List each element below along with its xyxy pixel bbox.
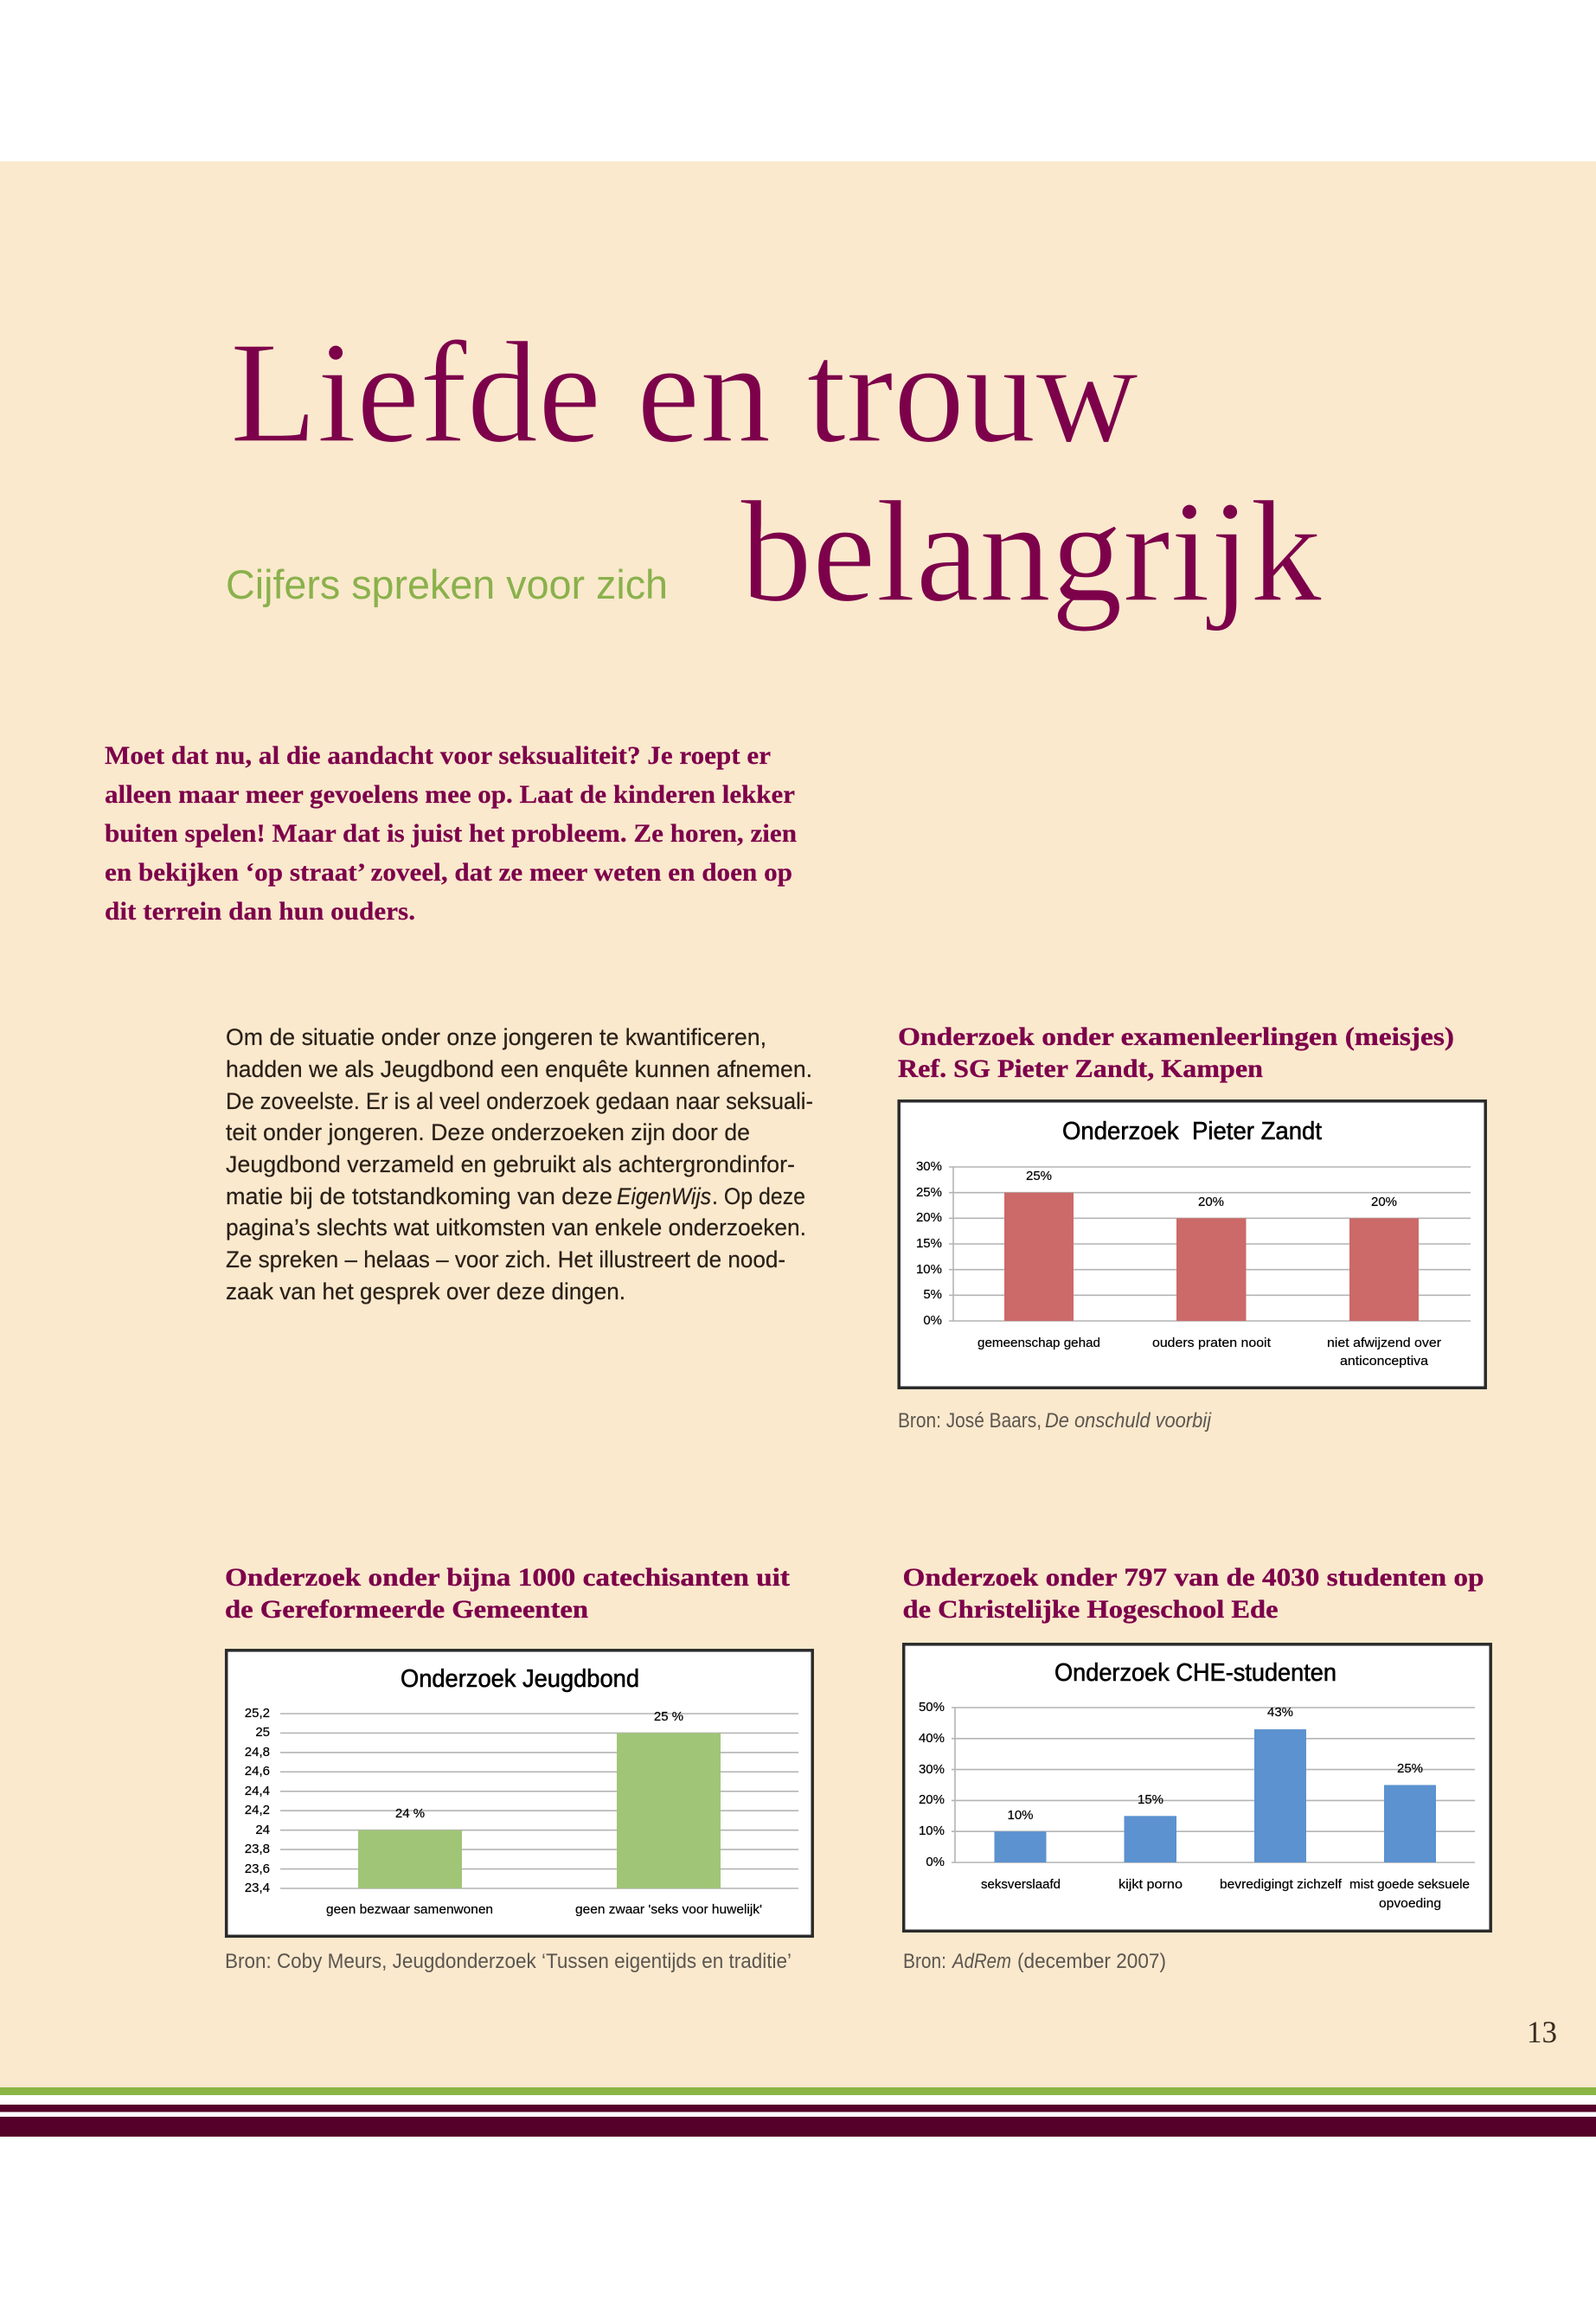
heading: Onderzoek onder examenleerlingen (meisjes) (898, 1022, 1454, 1051)
body text block: Jeugdbond verzameld en gebruikt als achtergrondinfor- (226, 1151, 795, 1177)
y axis labels: 24 (255, 1823, 270, 1837)
y axis labels: 24,2 (245, 1803, 270, 1817)
panel: onderzoek CHE-studenten (903, 1563, 1490, 1973)
category labels (981, 1877, 1470, 1911)
y axis labels (916, 1159, 942, 1328)
category labels: bevredigingt zichzelf (1220, 1877, 1343, 1892)
category labels: mist goede seksuele (1349, 1877, 1470, 1892)
value labels: 20% (1198, 1195, 1224, 1209)
intro text block: alleen maar meer gevoelens mee op. Laat de kinderen lekker (105, 780, 795, 809)
value labels (1007, 1705, 1423, 1823)
y axis labels: 30% (916, 1159, 942, 1174)
value labels: 20% (1371, 1195, 1397, 1209)
source: De onschuld voorbij (1045, 1409, 1212, 1433)
body text block: EigenWijs (617, 1183, 711, 1209)
bar chart: Pieter Zandt (899, 1101, 1485, 1388)
y axis labels (919, 1700, 945, 1869)
source: Bron: Coby Meurs, Jeugdonderzoek ‘Tussen eigentijds en traditie’ (225, 1950, 792, 1973)
value labels (1026, 1169, 1397, 1209)
bars (995, 1729, 1436, 1862)
heading (225, 1563, 790, 1624)
body text block: Om de situatie onder onze jongeren te kwantificeren, (226, 1024, 766, 1050)
y axis labels: 20% (919, 1792, 945, 1807)
intro text block: buiten spelen! Maar dat is juist het probleem. Ze horen, zien (105, 819, 797, 848)
panel: onderzoek Pieter Zandt (898, 1022, 1485, 1433)
value labels: 25% (1026, 1169, 1052, 1183)
value labels (395, 1709, 683, 1821)
chart title: Onderzoek CHE-studenten (1054, 1659, 1336, 1687)
category labels: seksverslaafd (981, 1877, 1061, 1892)
body text block: matie bij de totstandkoming van deze (226, 1183, 612, 1209)
source (903, 1950, 1166, 1973)
heading: de Christelijke Hogeschool Ede (903, 1595, 1279, 1624)
source (898, 1409, 1212, 1433)
body text block: De zoveelste. Er is al veel onderzoek gedaan naar seksuali- (226, 1088, 813, 1114)
body text block: Ze spreken – helaas – voor zich. Het illustreert de nood- (226, 1247, 785, 1272)
category labels: geen bezwaar samenwonen (326, 1902, 493, 1917)
category labels: geen zwaar 'seks voor huwelijk' (575, 1902, 762, 1917)
y axis labels: 15% (916, 1236, 942, 1251)
title (230, 312, 1322, 632)
y axis labels: 23,6 (245, 1862, 270, 1876)
y axis labels: 5% (923, 1287, 942, 1302)
y axis labels: 10% (919, 1823, 945, 1838)
heading: Onderzoek onder bijna 1000 catechisanten uit (225, 1563, 790, 1592)
value labels: 43% (1267, 1705, 1293, 1720)
title: Liefde en trouw (230, 312, 1138, 473)
value labels: 24 % (395, 1806, 425, 1821)
y axis labels: 20% (916, 1210, 942, 1225)
bars (1004, 1193, 1419, 1321)
body text block: zaak van het gesprek over deze dingen. (226, 1279, 625, 1304)
category labels: anticonceptiva (1340, 1354, 1429, 1368)
y axis labels: 30% (919, 1762, 945, 1777)
body text block: pagina’s slechts wat uitkomsten van enkele onderzoeken. (226, 1215, 806, 1240)
body text block: . Op deze (712, 1183, 805, 1209)
source: AdRem (951, 1950, 1011, 1973)
y axis labels: 23,4 (245, 1881, 270, 1895)
value labels: 25% (1397, 1761, 1423, 1776)
y axis labels: 0% (926, 1855, 945, 1869)
y axis labels (245, 1706, 270, 1895)
heading: Onderzoek onder 797 van de 4030 studenten op (903, 1563, 1484, 1592)
category labels: gemeenschap gehad (977, 1336, 1100, 1350)
y axis labels: 0% (923, 1313, 942, 1328)
body text block: teit onder jongeren. Deze onderzoeken zijn door de (226, 1119, 750, 1145)
heading: Ref. SG Pieter Zandt, Kampen (898, 1054, 1263, 1083)
source: Bron: José Baars, (898, 1409, 1042, 1433)
intro text block (105, 741, 797, 926)
y axis labels: 24,6 (245, 1764, 270, 1779)
value labels: 25 % (654, 1709, 683, 1724)
bars (358, 1733, 721, 1888)
category labels (326, 1902, 762, 1917)
body text block (226, 1024, 813, 1304)
y axis labels: 40% (919, 1731, 945, 1746)
heading: de Gereformeerde Gemeenten (225, 1595, 588, 1624)
y axis labels: 24,4 (245, 1784, 270, 1798)
heading (898, 1022, 1454, 1083)
intro text block: en bekijken ‘op straat’ zoveel, dat ze meer weten en doen op (105, 858, 792, 887)
category labels (977, 1336, 1441, 1368)
y axis labels: 25,2 (245, 1706, 270, 1721)
y axis labels: 50% (919, 1700, 945, 1715)
chart title: Onderzoek Jeugdbond (401, 1665, 639, 1693)
intro text block: Moet dat nu, al die aandacht voor seksualiteit? Je roept er (105, 741, 771, 770)
page number: 13 (1527, 2015, 1557, 2049)
title: belangrijk (740, 471, 1322, 632)
category labels: niet afwijzend over (1327, 1336, 1441, 1350)
y axis labels: 25% (916, 1185, 942, 1200)
category labels: kijkt porno (1118, 1877, 1183, 1892)
panel: onderzoek Jeugdbond (225, 1563, 812, 1973)
source: Bron: (903, 1950, 946, 1973)
y axis labels: 25 (255, 1725, 270, 1740)
y axis labels: 24,8 (245, 1745, 270, 1759)
intro text block: dit terrein dan hun ouders. (105, 897, 415, 926)
y axis labels: 10% (916, 1262, 942, 1277)
bar chart: Jeugdbond (227, 1650, 812, 1936)
category labels: opvoeding (1379, 1896, 1441, 1911)
source: (december 2007) (1017, 1950, 1166, 1973)
category labels: ouders praten nooit (1152, 1336, 1272, 1350)
body text block: hadden we als Jeugdbond een enquête kunnen afnemen. (226, 1056, 812, 1082)
value labels: 10% (1007, 1808, 1034, 1823)
y axis labels: 23,8 (245, 1842, 270, 1856)
bar chart: CHE-studenten (904, 1644, 1490, 1931)
footer stripes (0, 2087, 1596, 2137)
value labels: 15% (1138, 1792, 1163, 1807)
heading (903, 1563, 1484, 1624)
chart title: Onderzoek Pieter Zandt (1062, 1118, 1322, 1145)
subtitle: Cijfers spreken voor zich (226, 561, 668, 607)
